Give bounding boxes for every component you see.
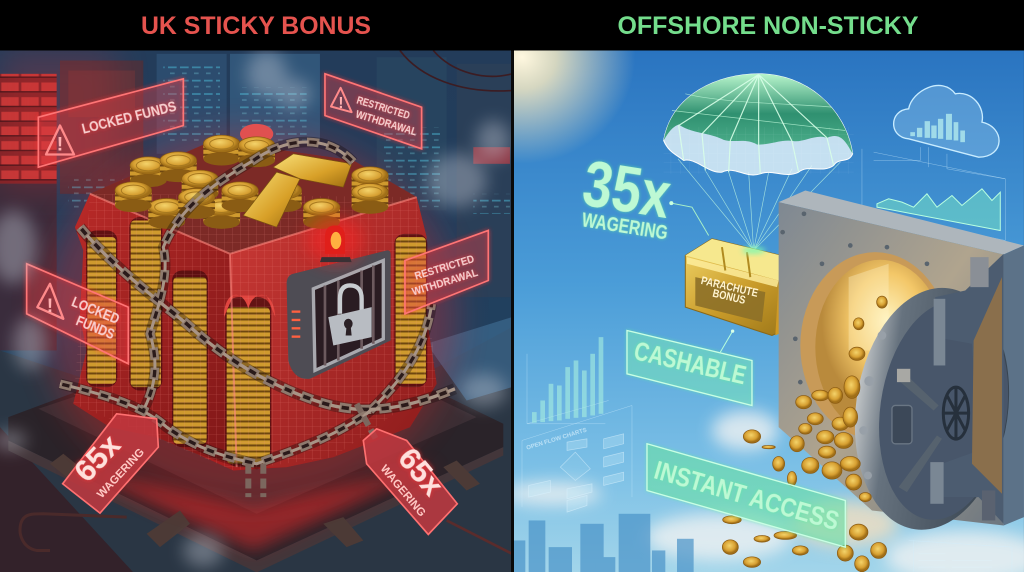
label: instant access: INSTANT ACCESS: [651, 455, 843, 536]
panel: UK sticky bonus locked cube: [0, 50, 512, 572]
label: 35x wagering: 35x: [578, 146, 676, 232]
treasure chest: parachute bonus: PARACHUTE: [700, 275, 760, 300]
coin columns: [87, 220, 426, 464]
tag: 65x wagering left: WAGERING: [95, 446, 147, 501]
sun glare: [514, 50, 632, 160]
clouds: [502, 410, 1024, 572]
label: restricted withdrawal right: WITHDRAWAL: [411, 267, 480, 298]
area chart hologram: [862, 149, 1005, 240]
vault opening: [800, 252, 934, 436]
top title bar: [0, 0, 1024, 51]
server room background: [0, 50, 512, 350]
smoke: [0, 50, 510, 567]
label: restricted withdrawal upper right: WITHDRAWAL: [354, 109, 418, 139]
label: locked funds upper left: LOCKED FUNDS: [80, 99, 178, 138]
tag: 65x wagering right: [363, 429, 457, 534]
label: cashable: [627, 329, 752, 405]
city skyline: [512, 514, 694, 572]
flow chart hologram: [522, 405, 632, 512]
label: locked funds left: [27, 264, 128, 364]
falling gold coins: [722, 296, 887, 572]
treasure chest: parachute bonus: BONUS: [711, 288, 747, 307]
cube of coins in red mesh: [73, 124, 437, 470]
icon: warning triangle: [46, 125, 74, 155]
treasure chest: parachute bonus: [684, 238, 779, 336]
icon: warning triangle: !: [57, 134, 63, 155]
dark recesses: [86, 217, 427, 467]
label: locked funds upper left: [38, 79, 183, 167]
document hologram bottom right: [909, 540, 1012, 572]
tag: 65x wagering right: WAGERING: [378, 463, 428, 519]
vault door: [854, 288, 1010, 530]
label: restricted withdrawal upper right: [325, 74, 422, 149]
steel lock panel with padlock: [287, 250, 391, 379]
flow chart hologram: OPEN FLOW CHARTS: [526, 428, 588, 452]
chains: [60, 142, 455, 497]
icon: warning triangle: !: [338, 95, 344, 112]
suspension lines: [678, 159, 840, 250]
label: cashable: CASHABLE: [631, 335, 749, 390]
panel: offshore non-sticky open vault: [514, 50, 1024, 572]
red glow behind cube: [43, 130, 457, 504]
platform: [8, 370, 503, 572]
gold coins and bars on top: [115, 135, 388, 229]
divider between panels: [511, 51, 514, 572]
red siren light: [307, 217, 363, 264]
bank vault: [779, 190, 1024, 540]
label: locked funds left: LOCKED: [69, 294, 122, 328]
parachute: [664, 74, 854, 250]
icon: warning triangle: !: [47, 296, 53, 317]
heading: offshore non-sticky: OFFSHORE NON-STICKY: [618, 12, 919, 40]
label: restricted withdrawal right: RESTRICTED: [413, 253, 476, 283]
floor: [0, 327, 512, 572]
red mesh overlay: [73, 194, 437, 470]
tag: 65x wagering left: [63, 414, 158, 513]
tag: 65x wagering left: 65x: [68, 428, 127, 489]
label: 35x wagering: WAGERING: [580, 209, 669, 245]
bar chart hologram: [527, 337, 609, 424]
label: restricted withdrawal upper right: RESTRICTED: [355, 95, 411, 122]
label: restricted withdrawal right: [405, 230, 488, 314]
heading: UK sticky bonus: UK STICKY BONUS: [141, 12, 371, 40]
cloud chart hologram: [874, 85, 1005, 179]
tag: 65x wagering right: 65x: [391, 441, 450, 502]
label: locked funds left: FUNDS: [73, 313, 117, 343]
